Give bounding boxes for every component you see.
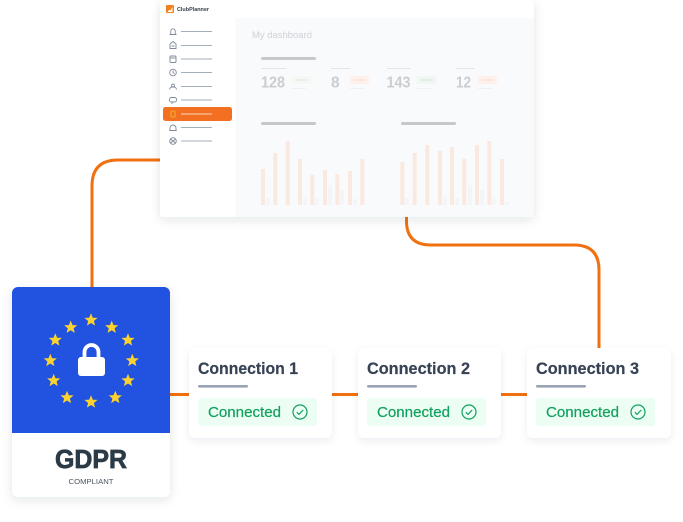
panel: connection 3	[527, 348, 671, 438]
status pill	[198, 398, 317, 426]
heading: Connection 2: Connection 2	[367, 359, 470, 378]
status pill	[536, 398, 655, 426]
icon: check	[293, 405, 307, 419]
icon: padlock	[78, 345, 105, 376]
text: compliant: COMPLIANT	[68, 477, 114, 486]
icon: EU stars	[44, 313, 139, 408]
connector lines	[92, 160, 599, 394]
heading: My dashboard: My dashboard	[252, 30, 312, 40]
logo: ClubPlanner	[166, 5, 210, 13]
sidebar menu	[163, 29, 232, 144]
text: GDPR: GDPR	[55, 446, 127, 474]
status pill: Connected	[208, 405, 281, 421]
status pill: Connected	[377, 405, 450, 421]
heading: Connection 1: Connection 1	[198, 359, 298, 378]
stats row: 128	[261, 74, 285, 92]
panel: dashboard window	[160, 0, 534, 217]
blue EU field	[12, 287, 170, 433]
stats row	[261, 57, 497, 92]
stats row: 12	[456, 74, 471, 92]
status pill	[367, 398, 486, 426]
panel: connection 1	[189, 348, 332, 438]
panel: connection 2	[358, 348, 501, 438]
heading: Connection 3: Connection 3	[536, 359, 639, 378]
icon: check	[631, 405, 645, 419]
stats row: 143	[386, 74, 411, 92]
logo: ClubPlanner: ClubPlanner	[177, 7, 210, 13]
dashboard main background	[236, 18, 534, 217]
panel: GDPR badge	[12, 287, 170, 497]
chart: right bars	[400, 122, 509, 205]
chart: left bars	[261, 122, 364, 205]
stats row: 8	[331, 74, 340, 92]
status pill: Connected	[546, 405, 619, 421]
icon: check	[462, 405, 476, 419]
